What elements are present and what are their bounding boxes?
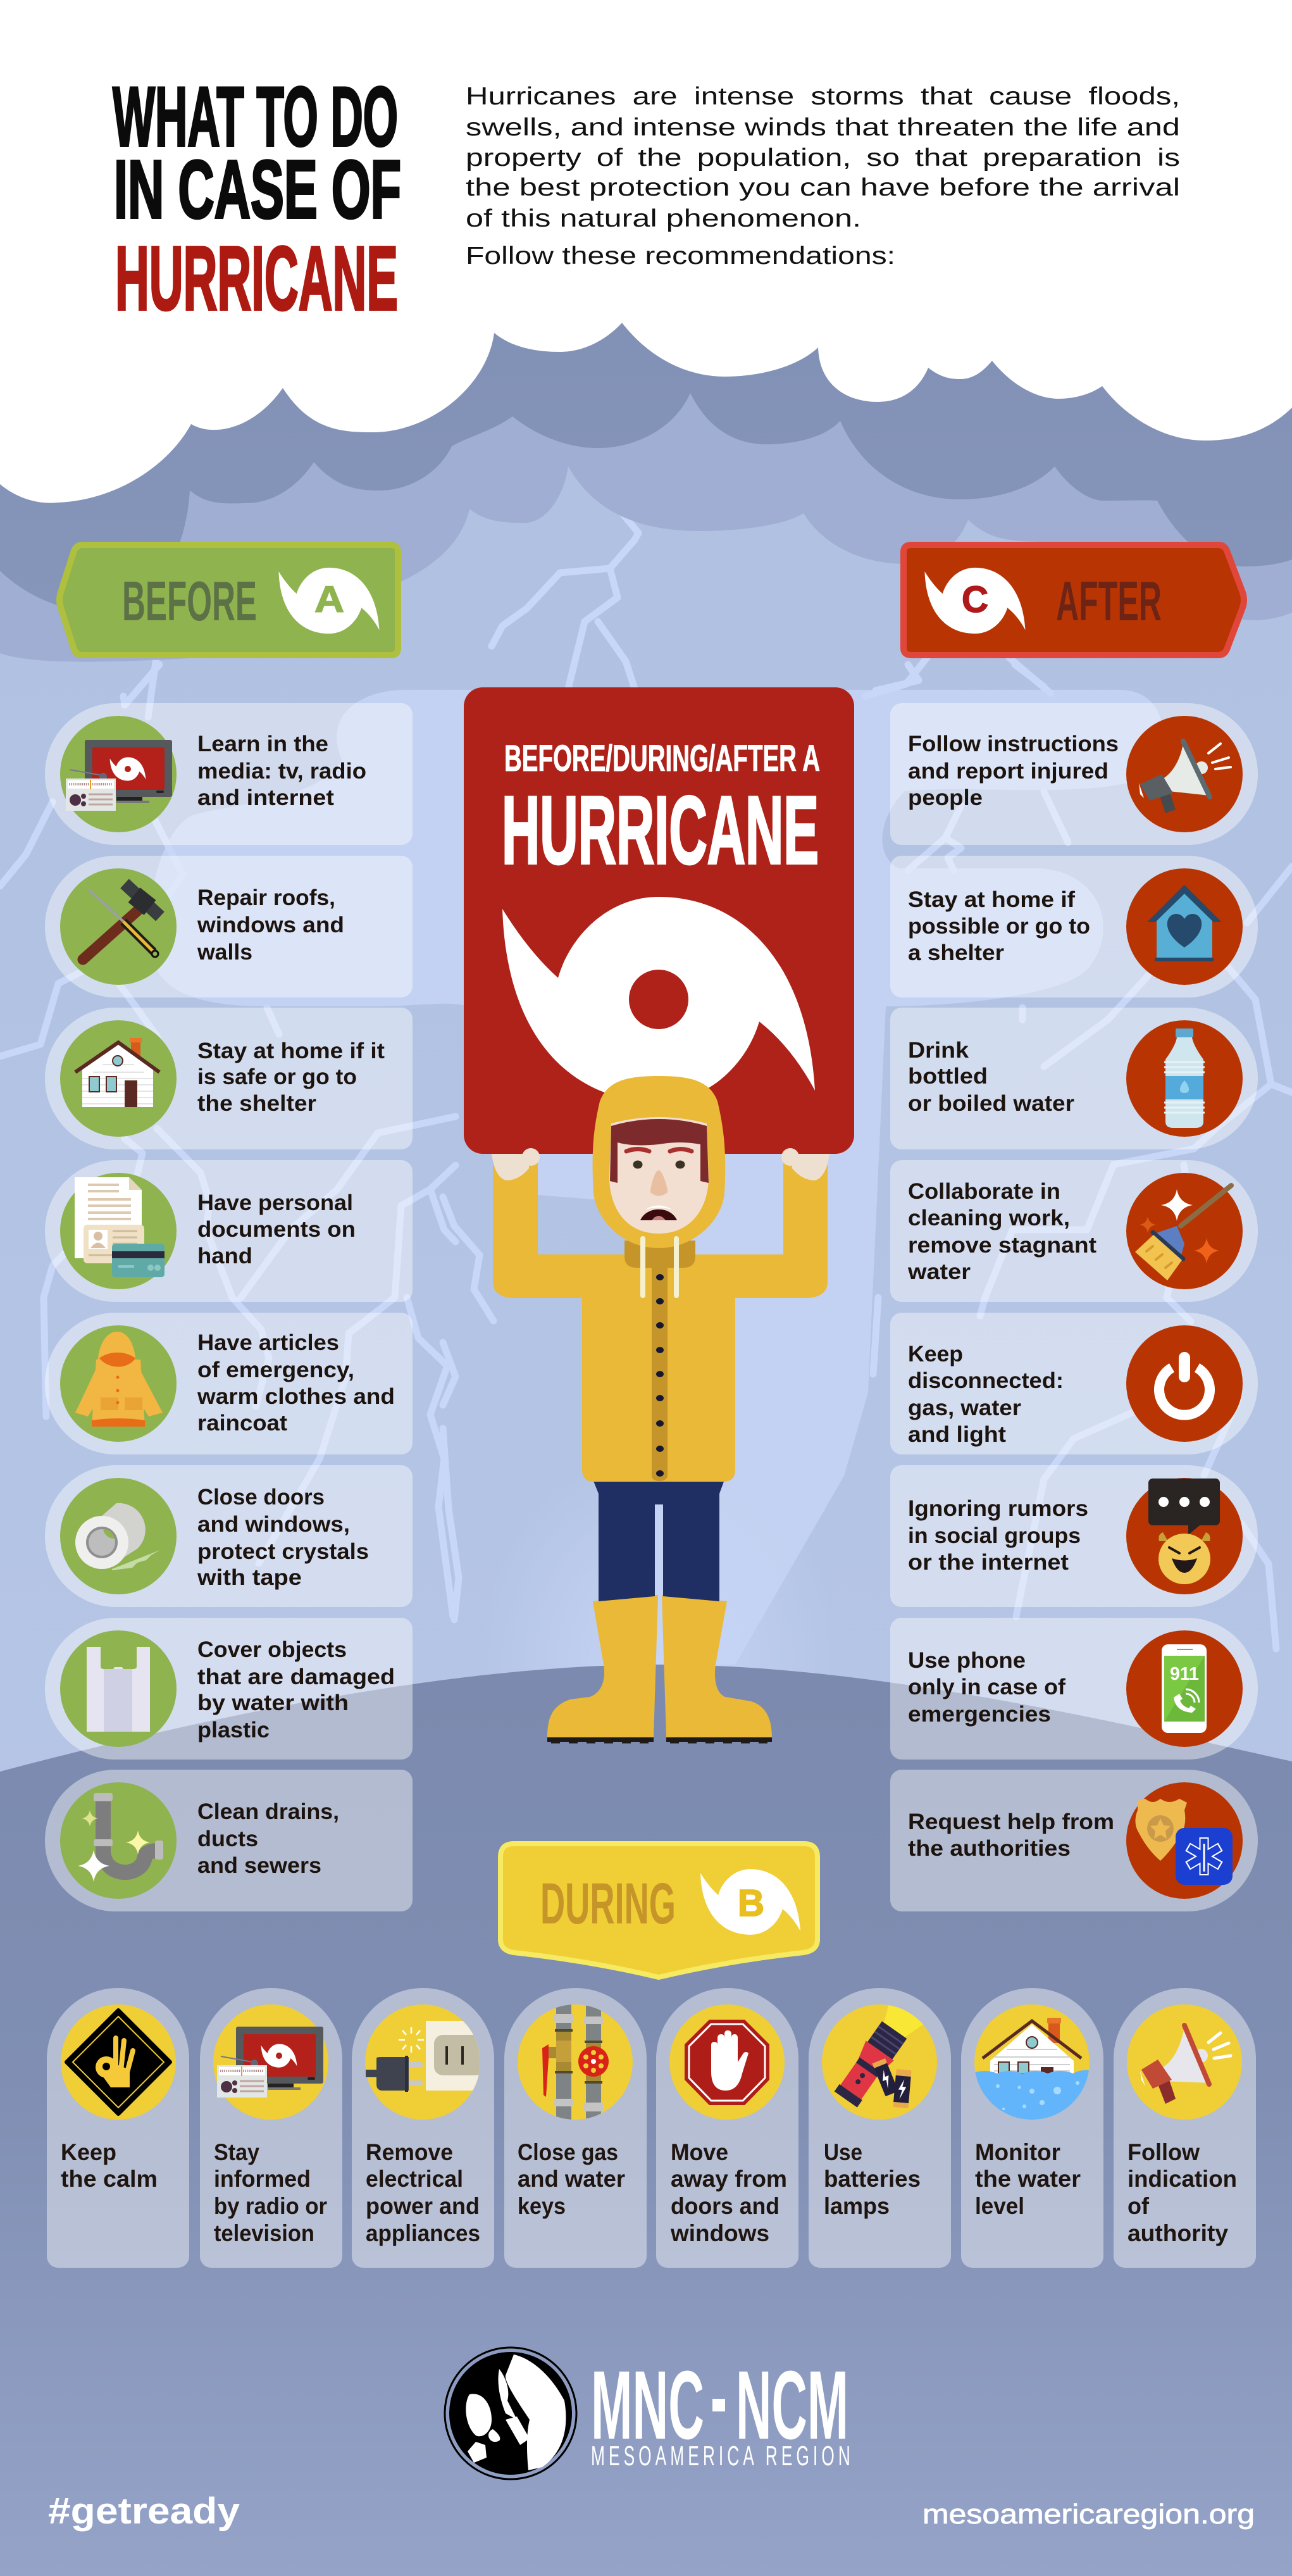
badge: after C: C: [962, 579, 988, 620]
card: monitor the water level: the water: [975, 2166, 1081, 2192]
card: clean drains: Clean drains,: [197, 1799, 339, 1824]
card: stay at home: Stay at home if it: [197, 1039, 385, 1063]
card: remove electrical power: appliances: [366, 2220, 480, 2246]
card: move away: Move: [671, 2139, 728, 2165]
badge: before A: A: [314, 579, 344, 620]
badge: during B: [500, 1844, 817, 1977]
card: move away: away from: [671, 2166, 787, 2192]
card: close gas and water keys: Close gas: [518, 2139, 618, 2165]
card: move away: windows: [670, 2220, 769, 2246]
card: keep disconnected: gas, water: [908, 1396, 1021, 1420]
card: monitor the water level: level: [975, 2193, 1024, 2219]
card: request help: the authorities: [908, 1836, 1071, 1861]
card: collaborate cleaning: Collaborate in: [908, 1179, 1060, 1204]
card: use batteries lamps: lamps: [824, 2193, 890, 2219]
card: emergency articles: [45, 1313, 413, 1454]
intro paragraph: [466, 83, 1180, 270]
intro paragraph: Follow these recommendations:: [466, 242, 895, 270]
placket and buttons: [652, 1268, 668, 1481]
card: stay at home: the shelter: [197, 1091, 316, 1116]
logo: MNC NCM: MESOAMERICA REGION: [591, 2440, 850, 2472]
card: stay at home or shelter: a shelter: [908, 941, 1004, 965]
card: stay informed: [200, 1988, 342, 2268]
card: stay informed: Stay: [214, 2139, 259, 2165]
card: stay informed: informed: [214, 2166, 311, 2192]
card: emergency articles: warm clothes and: [197, 1384, 395, 1409]
card: follow indication of authority: of: [1127, 2193, 1150, 2219]
card: move away: [656, 1988, 798, 2268]
intro paragraph: the best protection you can have before the arrival: [466, 174, 1180, 201]
card: stay at home or shelter: Stay at home if: [908, 887, 1075, 912]
intro paragraph: swells, and intense winds that threaten the life and: [466, 114, 1180, 141]
white top cloud: [0, 0, 1292, 503]
badge: during B: DURING: [540, 1872, 676, 1936]
card: ignoring rumors: [890, 1465, 1258, 1607]
card: monitor the water level: [961, 1988, 1103, 2268]
card: close doors: protect crystals: [197, 1539, 369, 1564]
card: close doors: and windows,: [197, 1512, 350, 1537]
card: stay at home or shelter: possible or go to: [908, 914, 1090, 939]
card: repair roofs: walls: [197, 940, 252, 965]
card: remove electrical power: Remove: [366, 2139, 453, 2165]
card: stay at home or shelter: [890, 856, 1258, 997]
card: drink water: or boiled water: [908, 1091, 1074, 1116]
title: [113, 70, 401, 329]
card: keep the calm: [47, 1988, 189, 2268]
card: learn in the media: Learn in the: [197, 732, 328, 756]
card: follow indication of authority: [1114, 1988, 1256, 2268]
card: personal documents: documents on: [197, 1217, 356, 1242]
card: follow indication of authority: Follow: [1127, 2139, 1200, 2165]
card: remove electrical power: [352, 1988, 494, 2268]
card: follow instructions: [890, 703, 1258, 845]
logo emblem: [445, 2348, 576, 2479]
badge: after C: AFTER: [1056, 570, 1162, 632]
hurricane sign: HURRICANE: [502, 777, 819, 884]
card: repair roofs: windows and: [197, 913, 344, 937]
card: stay at home: [45, 1008, 413, 1149]
card: keep disconnected: disconnected:: [908, 1368, 1064, 1393]
card: repair roofs: Repair roofs,: [197, 885, 335, 910]
card: stay at home: is safe or go to: [197, 1065, 357, 1089]
card: remove electrical power: power and: [366, 2193, 480, 2219]
card: collaborate cleaning: [890, 1160, 1258, 1302]
logo: MNC NCM: NCM: [736, 2351, 848, 2460]
card: clean drains: ducts: [197, 1827, 258, 1851]
card: follow instructions: people: [908, 785, 983, 810]
card: close doors: Close doors: [197, 1485, 325, 1510]
card: use batteries lamps: batteries: [824, 2166, 921, 2192]
card: keep disconnected: and light: [908, 1422, 1006, 1447]
card: keep disconnected: Keep: [908, 1342, 963, 1366]
card: cover objects: plastic: [197, 1718, 270, 1742]
card: close gas and water keys: keys: [518, 2193, 566, 2219]
card: drink water: Drink: [908, 1038, 969, 1063]
logo: MNC NCM: MNC: [591, 2351, 704, 2460]
card: learn in the media: and internet: [197, 785, 334, 810]
card: request help: Request help from: [908, 1810, 1114, 1834]
card: use phone: 911: [1170, 1664, 1199, 1684]
card: clean drains: [45, 1770, 413, 1911]
badge: before A: BEFORE: [122, 570, 257, 632]
card: collaborate cleaning: cleaning work,: [908, 1206, 1070, 1230]
panel: after column: [890, 703, 1258, 1911]
card: use phone: Use phone: [908, 1648, 1026, 1673]
intro paragraph: Hurricanes are intense storms that cause floods,: [466, 83, 1180, 110]
card: drink water: [890, 1008, 1258, 1149]
hurricane sign: BEFORE/DURING/AFTER A: [504, 738, 820, 779]
card: use phone: only in case of: [908, 1675, 1065, 1699]
intro paragraph: property of the population, so that preparation is: [466, 144, 1180, 172]
person in raincoat: [492, 1076, 829, 1742]
card: close gas and water keys: [504, 1988, 647, 2268]
badge: during B: B: [738, 1882, 764, 1924]
card: use batteries lamps: Use: [824, 2139, 862, 2165]
medium cloud layer: [0, 0, 1292, 662]
badge: after C: [904, 545, 1244, 655]
card: learn in the media: media: tv, radio: [197, 759, 366, 784]
card: keep disconnected: [890, 1313, 1258, 1454]
card: close doors: with tape: [197, 1565, 302, 1590]
card: ignoring rumors: or the internet: [908, 1550, 1069, 1575]
title: WHAT TO DO: [113, 70, 398, 164]
panel: during row: [47, 1988, 1256, 2268]
card: personal documents: [45, 1160, 413, 1302]
card: follow indication of authority: authority: [1127, 2220, 1228, 2246]
card: stay informed: television: [214, 2220, 314, 2246]
card: follow instructions: and report injured: [908, 759, 1109, 784]
card: collaborate cleaning: water: [907, 1260, 971, 1284]
card: repair roofs: [45, 856, 413, 997]
card: personal documents: hand: [197, 1244, 252, 1268]
card: keep the calm: the calm: [61, 2166, 158, 2192]
intro paragraph: of this natural phenomenon.: [466, 205, 861, 232]
card: keep the calm: Keep: [61, 2139, 116, 2165]
card: move away: doors and: [671, 2193, 780, 2219]
card: follow instructions: Follow instructions: [908, 732, 1119, 756]
card: close doors: [45, 1465, 413, 1607]
website: mesoamericaregion.org: [922, 2499, 1255, 2530]
card: ignoring rumors: Ignoring rumors: [908, 1496, 1088, 1521]
card: cover objects: that are damaged: [197, 1665, 395, 1689]
card: emergency articles: Have articles: [197, 1330, 339, 1355]
raincoat body: [493, 1163, 828, 1482]
title: IN CASE OF: [114, 143, 401, 235]
title: HURRICANE: [115, 228, 398, 329]
card: cover objects: by water with: [197, 1691, 349, 1715]
card: learn in the media: [45, 703, 413, 845]
hands: [492, 1148, 829, 1180]
card: collaborate cleaning: remove stagnant: [908, 1233, 1096, 1258]
card: remove electrical power: electrical: [366, 2166, 463, 2192]
card: stay informed: by radio or: [214, 2193, 327, 2219]
logo: MNC NCM: [445, 2348, 850, 2479]
trousers: [591, 1475, 726, 1601]
face: [609, 1117, 709, 1234]
card: use batteries lamps: [809, 1988, 951, 2268]
drawstrings: [643, 1239, 676, 1296]
card: use phone: [890, 1618, 1258, 1760]
card: request help: [890, 1770, 1258, 1911]
hood: [593, 1076, 725, 1248]
lightning bolts: [0, 508, 1292, 1649]
boots: [547, 1595, 772, 1742]
badge: before A: [59, 545, 398, 655]
hurricane sign: [464, 687, 854, 1154]
dark cloud layer: [0, 0, 1292, 613]
hashtag: #getready: [48, 2491, 240, 2532]
card: cover objects: Cover objects: [197, 1637, 347, 1662]
card: ignoring rumors: in social groups: [908, 1523, 1081, 1548]
card: monitor the water level: Monitor: [975, 2139, 1060, 2165]
ground: [0, 1665, 1292, 2576]
card: emergency articles: raincoat: [197, 1411, 287, 1435]
card: follow indication of authority: indication: [1127, 2166, 1237, 2192]
card: clean drains: and sewers: [197, 1853, 321, 1878]
card: emergency articles: of emergency,: [197, 1358, 354, 1382]
card: personal documents: Have personal: [197, 1191, 353, 1215]
card: use phone: emergencies: [908, 1702, 1051, 1727]
card: close gas and water keys: and water: [518, 2166, 625, 2192]
collar: [624, 1241, 695, 1268]
panel: before column: [45, 703, 413, 1911]
card: cover objects: [45, 1618, 413, 1760]
card: drink water: bottled: [908, 1064, 988, 1089]
